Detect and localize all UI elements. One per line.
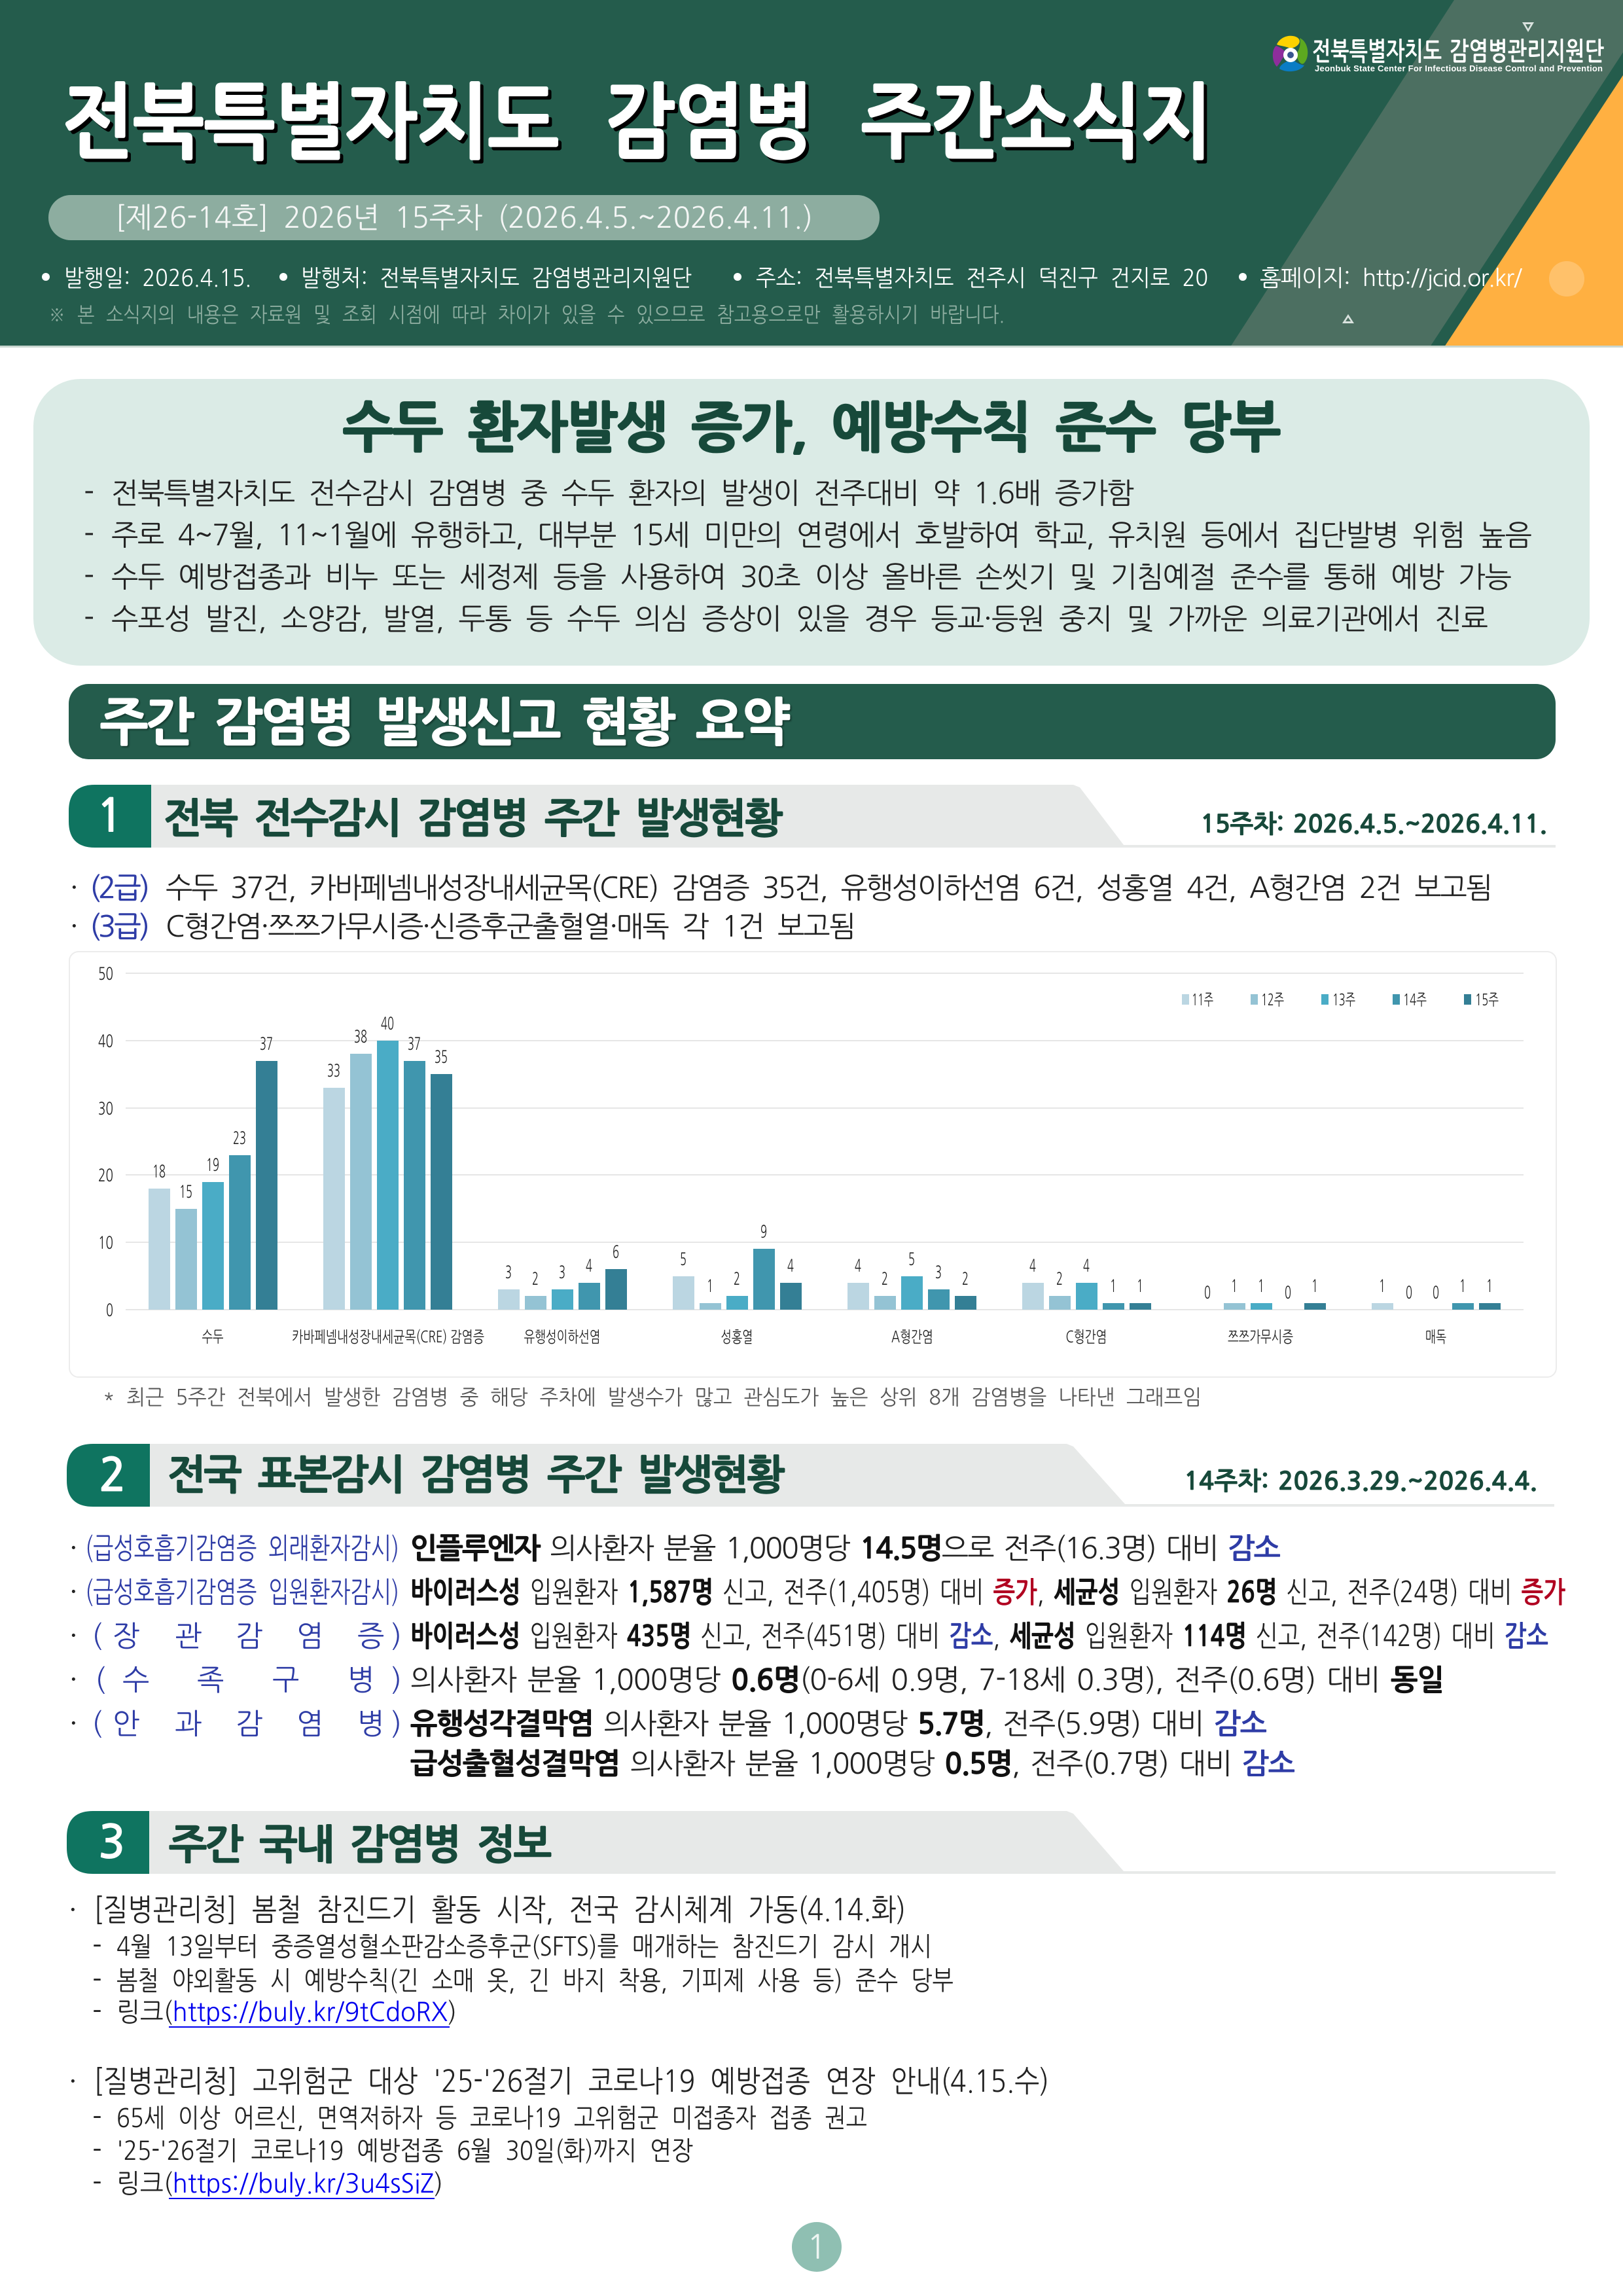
- bars: 매독: 0: [1433, 1284, 1439, 1301]
- bars: 수두: 15: [179, 1183, 192, 1200]
- bars: CRE: 40: [381, 1015, 394, 1032]
- bars: 쯔쯔가무시증: 1: [1311, 1278, 1318, 1295]
- y axis labels: 40: [98, 1033, 113, 1050]
- title: [62, 82, 1211, 163]
- row: 장관감염증: (장관감염증): [92, 1622, 402, 1651]
- publication info: 발행처: 전북특별자치도 감염병관리지원단: [301, 267, 692, 290]
- bars: 수두: 19: [206, 1157, 219, 1174]
- bars: 매독: 0: [1406, 1284, 1412, 1301]
- row: 안과감염병: 유행성각결막염 의사환자 분율 1,000명당 5.7명, 전주(5.9명) 대비 감소: [410, 1709, 1267, 1738]
- bars: C형간염: 2: [1056, 1270, 1063, 1287]
- section 1 summary text: ·: [70, 912, 79, 941]
- row: 인플루엔자: ·: [69, 1534, 78, 1563]
- news item 2: [69, 2066, 1049, 2198]
- row: 장관감염증: 바이러스성 입원환자 435명 신고, 전주(451명) 대비 감소, 세균성 입원환자 114명 신고, 전주(142명) 대비 감소: [410, 1621, 1548, 1651]
- news item 1: -: [92, 1933, 102, 1960]
- bars: 유행성이하선염: 4: [586, 1257, 592, 1274]
- issue pill: [제26-14호] 2026년 15주차 (2026.4.5.~2026.4.11.): [115, 203, 813, 232]
- bars: CRE: 38: [354, 1028, 367, 1045]
- row: 장관감염증: ·: [69, 1622, 78, 1651]
- panel: key message: -: [84, 521, 94, 550]
- bars: 성홍열: 2: [734, 1270, 740, 1287]
- bars: 쯔쯔가무시증: 0: [1285, 1284, 1291, 1301]
- legend: 14주: [1403, 992, 1427, 1008]
- bars: 매독: 1: [1486, 1278, 1493, 1295]
- disclaimer: ※ 본 소식지의 내용은 자료원 및 조회 시점에 따라 차이가 있을 수 있으므로 참고용으로만 활용하시기 바랍니다.: [48, 304, 1005, 325]
- section 1 summary text: ·: [70, 874, 79, 903]
- legend: 15주: [1475, 992, 1499, 1008]
- news item 2: 65세 이상 어르신, 면역저하자 등 코로나19 고위험군 미접종자 접종 권고: [116, 2105, 867, 2131]
- panel: key message: 수두 예방접종과 비누 또는 세정제 등을 사용하여 30초 이상 올바른 손씻기 및 기침예절 준수를 통해 예방 가능: [111, 563, 1512, 592]
- bars: 유행성이하선염: 유행성이하선염: [524, 1329, 601, 1345]
- banner heading: 주간 감염병 발생신고 현황 요약: [100, 697, 790, 748]
- section 3 heading: 3: [98, 1820, 126, 1865]
- legend: 13주: [1332, 992, 1355, 1008]
- bars: 성홍열: [673, 1223, 802, 1345]
- bars: 수두: [149, 1035, 277, 1345]
- bars: CRE: [292, 1015, 484, 1345]
- bars: 쯔쯔가무시증: 0: [1204, 1284, 1211, 1301]
- news item 2: -: [92, 2138, 102, 2164]
- banner heading: [69, 684, 1556, 759]
- row: 수족구병: ·: [69, 1666, 78, 1695]
- bars: 수두: 18: [152, 1163, 166, 1180]
- section 3 heading: [67, 1811, 1556, 1874]
- y axis labels: [98, 965, 113, 1319]
- section 2 heading: 14주차: 2026.3.29.~2026.4.4.: [1184, 1469, 1537, 1494]
- section 1 summary text: [70, 874, 1493, 941]
- bars: 수두: 수두: [202, 1329, 224, 1345]
- bars: 수두: 37: [260, 1035, 273, 1052]
- row: 인플루엔자: 인플루엔자 의사환자 분율 1,000명당 14.5명으로 전주(16.3명) 대비 감소: [410, 1534, 1281, 1563]
- row: 인플루엔자: (급성호흡기감염증 외래환자감시): [85, 1534, 399, 1563]
- publication info: 발행일: 2026.4.15.: [64, 267, 251, 290]
- bars: C형간염: 1: [1137, 1278, 1143, 1295]
- section 1 summary text: 수두 37건, 카바페넴내성장내세균목(CRE) 감염증 35건, 유행성이하선염 6건, 성홍열 4건, A형간염 2건 보고됨: [166, 874, 1493, 903]
- bars: 유행성이하선염: [498, 1244, 627, 1345]
- bars: 매독: 1: [1459, 1278, 1466, 1295]
- bars: CRE: 37: [408, 1035, 421, 1052]
- bars: A형간염: [847, 1251, 976, 1345]
- row: 입원환자 증가: ·: [69, 1578, 78, 1607]
- row: 안과감염병: ·: [69, 1710, 78, 1738]
- bars: 매독: 매독: [1425, 1329, 1446, 1345]
- section 1 heading: 1: [96, 794, 124, 839]
- panel: key message: [33, 379, 1590, 666]
- panel: key message: 주로 4~7월, 11~1월에 유행하고, 대부분 15세 미만의 연령에서 호발하여 학교, 유치원 등에서 집단발병 위험 높음: [111, 521, 1532, 550]
- legend: 11주: [1192, 992, 1213, 1008]
- bars: 매독: [1372, 1278, 1501, 1345]
- panel: key message: -: [84, 563, 94, 592]
- page number: 1: [807, 2231, 827, 2264]
- section 1 heading: 전북 전수감시 감염병 주간 발생현황: [164, 798, 783, 839]
- y axis labels: 0: [106, 1302, 113, 1319]
- section 1 heading: 15주차: 2026.4.5.~2026.4.11.: [1200, 812, 1547, 836]
- row: 입원환자 증가: (급성호흡기감염증 입원환자감시): [85, 1578, 399, 1607]
- panel: key message: 수포성 발진, 소양감, 발열, 두통 등 수두 의심 증상이 있을 경우 등교·등원 중지 및 가까운 의료기관에서 진료: [111, 605, 1488, 634]
- news item 2: '25-'26절기 코로나19 예방접종 6월 30일(화)까지 연장: [116, 2138, 693, 2164]
- y axis labels: 10: [98, 1234, 113, 1251]
- section 2 heading: 2: [99, 1453, 126, 1498]
- bars: 성홍열: 1: [707, 1278, 713, 1295]
- bars: C형간염: 1: [1110, 1278, 1116, 1295]
- news item 1: ·: [69, 1896, 77, 1925]
- bars: C형간염: 4: [1083, 1257, 1090, 1274]
- bars: 수두: 23: [233, 1130, 246, 1147]
- bars: 유행성이하선염: 2: [532, 1270, 539, 1287]
- bars: A형간염: 2: [882, 1270, 888, 1287]
- news item 2: ·: [69, 2068, 77, 2096]
- row: 수족구병: (수족구병): [95, 1666, 402, 1695]
- news item 1: 링크(https://buly.kr/9tCdoRX): [116, 1999, 457, 2025]
- title: 전북특별자치도: [62, 82, 559, 163]
- bars: 유행성이하선염: 3: [505, 1264, 512, 1281]
- row: 안과감염병: [69, 1709, 1295, 1778]
- logo: pinwheel and organisation name: [1273, 35, 1604, 73]
- title: 감염병: [605, 82, 813, 163]
- chart footnote: * 최근 5주간 전북에서 발생한 감염병 중 해당 주차에 발생수가 많고 관심도가 높은 상위 8개 감염병을 나타낸 그래프임: [103, 1387, 1202, 1408]
- bars: 쯔쯔가무시증: 쯔쯔가무시증: [1228, 1329, 1293, 1345]
- news item 1: 봄철 야외활동 시 예방수칙(긴 소매 옷, 긴 바지 착용, 기피제 사용 등) 준수 당부: [116, 1967, 954, 1994]
- bars: CRE: 33: [327, 1062, 340, 1079]
- panel: key message: -: [84, 479, 94, 508]
- bars: 성홍열: 9: [760, 1223, 767, 1240]
- news item 2: 링크(https://buly.kr/3u4sSiZ): [116, 2170, 443, 2197]
- bars: 매독: 1: [1379, 1278, 1385, 1295]
- issue pill: [48, 195, 880, 240]
- news item 1: -: [92, 1999, 102, 2025]
- section 2 surveillance lines: [69, 1534, 1565, 1778]
- y axis labels: 20: [98, 1167, 113, 1184]
- bars: 쯔쯔가무시증: 1: [1258, 1278, 1264, 1295]
- y axis labels: 30: [98, 1100, 113, 1117]
- row: 수족구병: 의사환자 분율 1,000명당 0.6명(0-6세 0.9명, 7-18세 0.3명), 전주(0.6명) 대비 동일: [410, 1665, 1444, 1695]
- bars: CRE: 35: [435, 1049, 448, 1066]
- bars: 유행성이하선염: 3: [559, 1264, 565, 1281]
- bars: A형간염: 3: [935, 1264, 942, 1281]
- bars: 유행성이하선염: 6: [613, 1244, 619, 1261]
- logo: pinwheel and organisation name: Jeonbuk State Center For Infectious Disease Control and Prevention: [1315, 63, 1603, 73]
- title: 주간소식지: [861, 82, 1211, 163]
- y axis labels: 50: [98, 965, 113, 982]
- section 2 heading: [67, 1444, 1554, 1507]
- bars: C형간염: [1022, 1257, 1151, 1345]
- logo: pinwheel and organisation name: 전북특별자치도: [1312, 39, 1442, 64]
- bars: C형간염: C형간염: [1065, 1329, 1107, 1345]
- news item 1: -: [92, 1967, 102, 1994]
- legend: [1182, 992, 1499, 1008]
- bars: 성홍열: 성홍열: [721, 1329, 753, 1345]
- bars: A형간염: 2: [962, 1270, 969, 1287]
- section 1 heading: [69, 785, 1556, 848]
- header panel: [0, 0, 1623, 348]
- publication info: [42, 267, 1523, 291]
- row: 안과감염병: 급성출혈성결막염 의사환자 분율 1,000명당 0.5명, 전주(0.7명) 대비 감소: [410, 1749, 1295, 1778]
- bars: A형간염: 4: [855, 1257, 861, 1274]
- bars: 성홍열: 5: [680, 1251, 687, 1268]
- bars: C형간염: 4: [1029, 1257, 1036, 1274]
- publication info: 주소: 전북특별자치도 전주시 덕진구 건지로 20: [756, 267, 1208, 290]
- bars: 쯔쯔가무시증: 1: [1231, 1278, 1238, 1295]
- panel: key message: 수두 환자발생 증가, 예방수칙 준수 당부: [343, 401, 1281, 455]
- section 1 summary text: (3급): [90, 912, 150, 941]
- chart card: [69, 952, 1556, 1377]
- legend: 12주: [1261, 992, 1284, 1008]
- row: 입원환자 증가: 바이러스성 입원환자 1,587명 신고, 전주(1,405명) 대비 증가, 세균성 입원환자 26명 신고, 전주(24명) 대비 증가: [410, 1577, 1565, 1607]
- section 3 heading: 주간 국내 감염병 정보: [169, 1824, 552, 1865]
- news item 2: -: [92, 2170, 102, 2197]
- bars: CRE: 카바페넴내성장내세균목(CRE) 감염증: [292, 1329, 484, 1345]
- news item 1: [69, 1895, 954, 2027]
- news item 1: 4월 13일부터 중증열성혈소판감소증후군(SFTS)를 매개하는 참진드기 감시 개시: [116, 1933, 932, 1960]
- bars: 쯔쯔가무시증: [1204, 1278, 1326, 1345]
- publication info: 홈페이지: http://jcid.or.kr/: [1260, 267, 1523, 291]
- bars: 성홍열: 4: [787, 1257, 794, 1274]
- section 1 summary text: (2급): [90, 874, 150, 903]
- news item 2: [질병관리청] 고위험군 대상 '25-'26절기 코로나19 예방접종 연장 안내(4.15.수): [94, 2066, 1049, 2096]
- page number: [792, 2222, 842, 2272]
- news item 2: -: [92, 2105, 102, 2131]
- section 1 summary text: C형간염·쯔쯔가무시증·신증후군출혈열·매독 각 1건 보고됨: [166, 912, 856, 941]
- news item 1: [질병관리청] 봄철 참진드기 활동 시작, 전국 감시체계 가동(4.14.화): [94, 1895, 906, 1925]
- panel: key message: 전북특별자치도 전수감시 감염병 중 수두 환자의 발생이 전주대비 약 1.6배 증가함: [111, 479, 1134, 508]
- panel: key message: -: [84, 605, 94, 634]
- bars: A형간염: 5: [908, 1251, 915, 1268]
- bars: A형간염: A형간염: [891, 1329, 933, 1345]
- section 2 heading: 전국 표본감시 감염병 주간 발생현황: [168, 1454, 785, 1496]
- row: 안과감염병: (안과감염병): [92, 1710, 402, 1738]
